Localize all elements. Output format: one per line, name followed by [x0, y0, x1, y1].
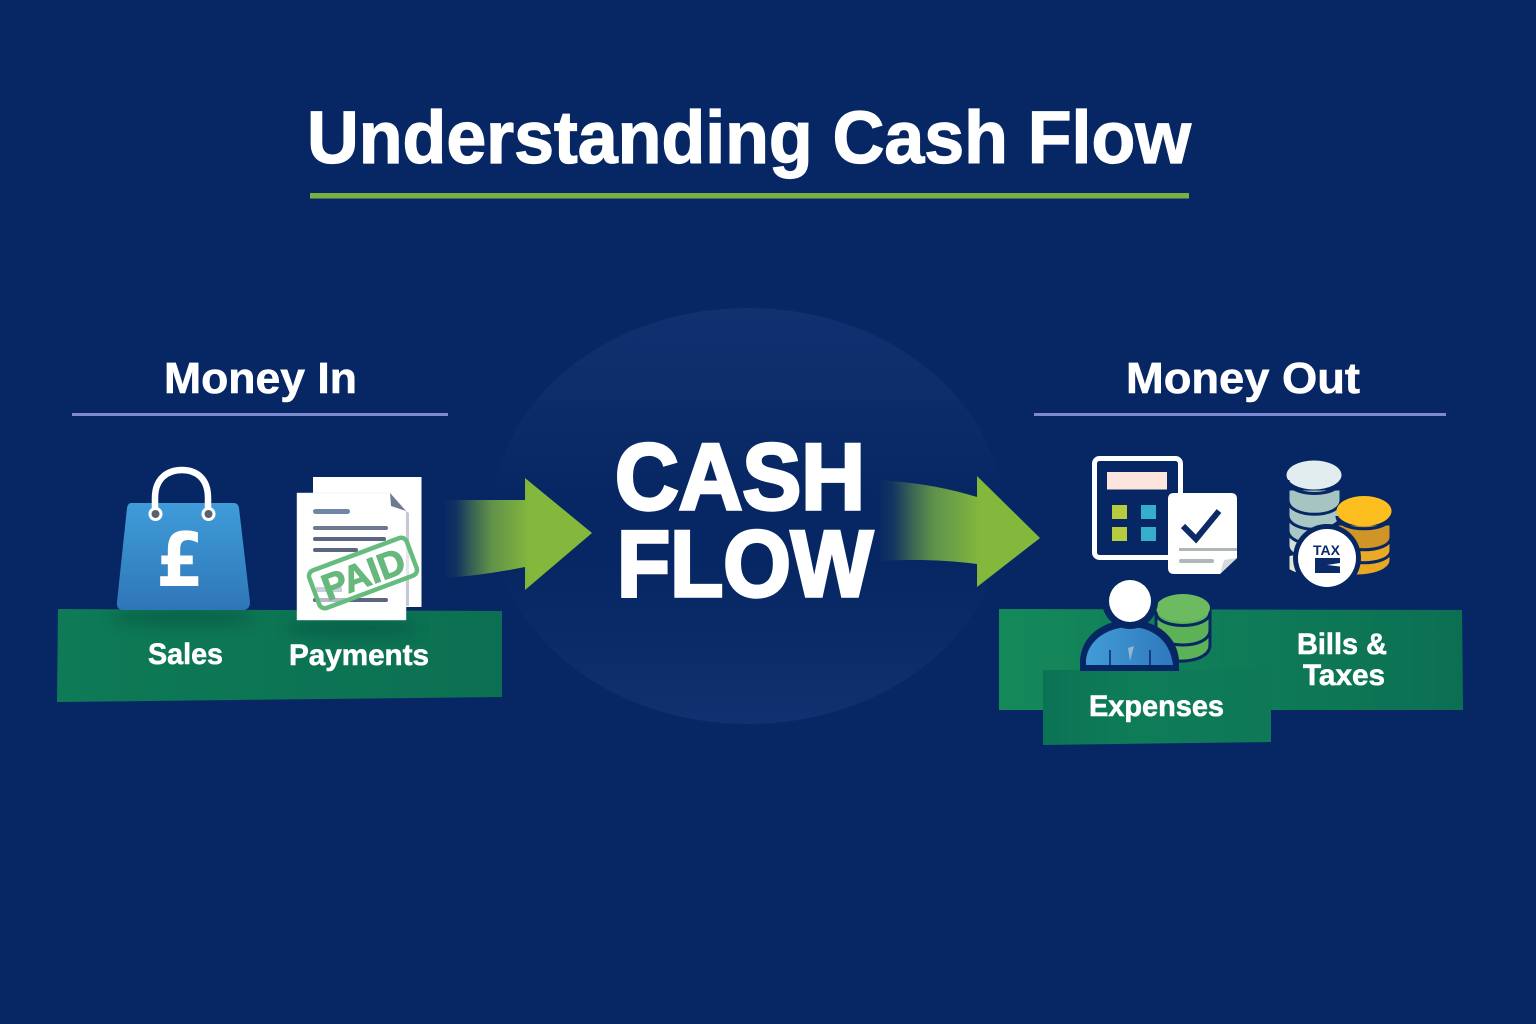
- person: [1080, 620, 1179, 671]
- tax badge: TAX: [1313, 542, 1341, 558]
- green coins: [1156, 594, 1210, 661]
- icon: shopping bag: £: [156, 516, 204, 604]
- arrow: money in to cash flow: [443, 478, 592, 590]
- label: expenses: Expenses: [1089, 690, 1224, 723]
- icon: paid documents: [297, 477, 422, 620]
- stamp: paid: PAID: [316, 540, 411, 609]
- silver coin stack: [1286, 460, 1342, 575]
- panel: money in: [57, 354, 502, 702]
- icon: coin stacks with tax badge: [1286, 460, 1392, 592]
- green band: money in: [57, 609, 502, 702]
- heading: money in: [72, 354, 448, 416]
- gold coin stack: [1336, 496, 1392, 576]
- icon: calculator: [1094, 458, 1180, 558]
- label: payments: Payments: [289, 639, 429, 672]
- central glow ellipse: [493, 308, 1003, 724]
- panel: money out: [999, 354, 1463, 745]
- label: bills and taxes: Taxes: [1303, 659, 1385, 692]
- green band: money out: [999, 609, 1463, 710]
- center label: cash flow: [615, 424, 873, 616]
- label: bills and taxes: [1297, 628, 1387, 692]
- heading: money out: [1034, 354, 1446, 416]
- icon: checked note: [1168, 493, 1237, 574]
- title: Understanding Cash Flow: [307, 96, 1191, 179]
- label: bills and taxes: Bills &: [1297, 628, 1387, 661]
- arrow: cash flow to money out: [878, 476, 1040, 587]
- green band: expenses: [1043, 670, 1271, 745]
- heading: money out: Money Out: [1126, 354, 1360, 403]
- label: sales: Sales: [148, 638, 223, 671]
- icon: person with green coins: [1080, 573, 1210, 671]
- icon: shopping bag: [117, 470, 250, 610]
- heading: money in: Money In: [164, 354, 357, 403]
- center label: cash flow: FLOW: [617, 511, 873, 616]
- center label: cash flow: CASH: [615, 424, 865, 529]
